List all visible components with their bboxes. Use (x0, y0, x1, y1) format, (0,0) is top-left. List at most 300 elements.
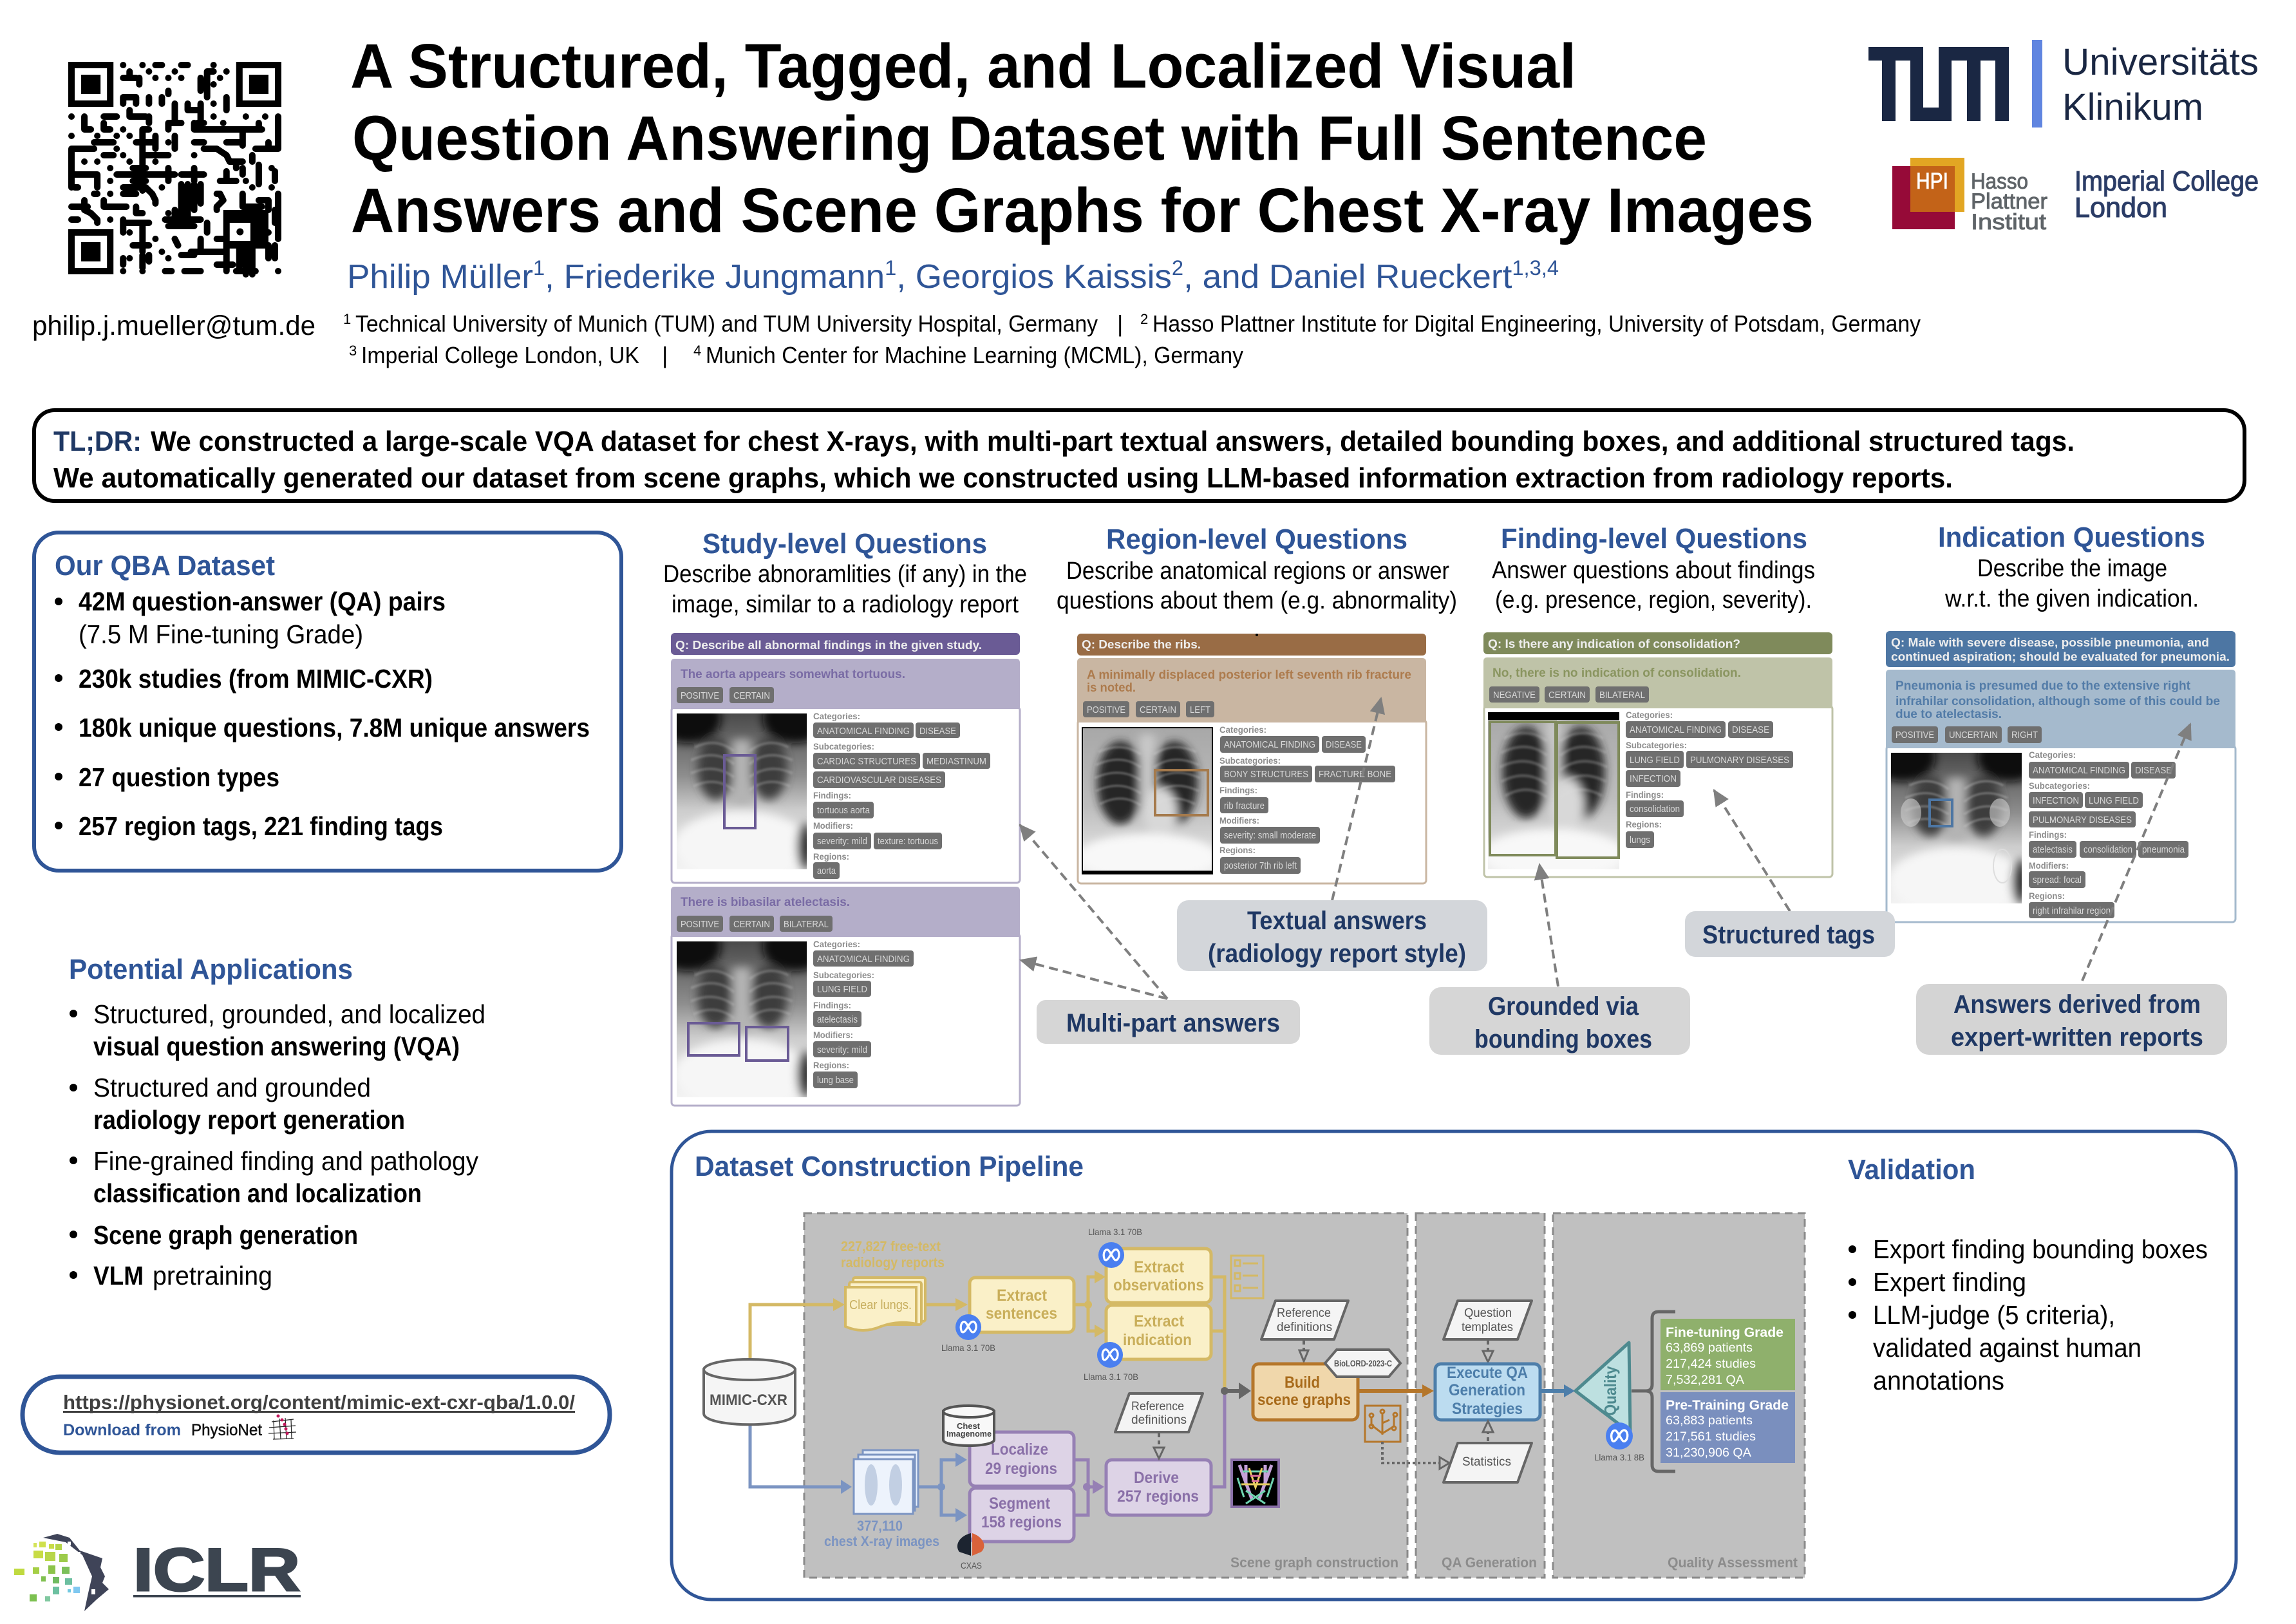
heading: Region-level Questions: Region-level Questions (1106, 524, 1407, 555)
stage: quality assessment: Quality Assessment (1668, 1554, 1798, 1571)
title (350, 31, 1814, 245)
callout: Answers derived from expert-written reports (1916, 984, 2227, 1055)
question bar (671, 633, 1020, 655)
model: BioLORD (1325, 1350, 1400, 1377)
structured tags: pneumonia (2142, 844, 2185, 855)
heading: Region-level Questions: questions about them (e.g. abnormality) (1057, 587, 1457, 614)
input: reference definitions bottom: Reference (1131, 1400, 1184, 1413)
validation list: annotations (1873, 1366, 2004, 1395)
panel: Our QBA Dataset (34, 533, 621, 871)
panel: TL;DR (34, 410, 2244, 501)
structured tags: BONY STRUCTURES (1224, 769, 1308, 780)
step: Segment 158 regions (970, 1488, 1074, 1542)
structured tags: MEDIASTINUM (927, 756, 986, 767)
dataset statistics list: 180k unique questions, 7.8M unique answers (79, 713, 590, 742)
heading: Indication Questions: Indication Questions (1938, 522, 2205, 553)
structured tags: Findings: (813, 790, 851, 800)
arrow: answers derived from reports (2082, 724, 2190, 981)
input: question templates: templates (1462, 1321, 1513, 1334)
question bar: Q: Is there any indication of consolidation? (1488, 637, 1740, 650)
step: Build scene graphs: scene graphs (1257, 1391, 1351, 1409)
step: Extract sentences: sentences (986, 1305, 1057, 1323)
icon: PhysioNet network (268, 1414, 296, 1439)
structured tags: Categories: (813, 939, 860, 949)
structured tags: lung base (817, 1075, 854, 1086)
step: Localize 29 regions: 29 regions (985, 1460, 1057, 1478)
structured tags: Regions: (2029, 891, 2065, 901)
structured tags: consolidation (2084, 844, 2132, 855)
affiliations: Munich Center for Machine Learning (MCML), Germany (706, 342, 1243, 368)
step: Extract sentences: Extract (997, 1287, 1048, 1305)
contact email: philip.j.mueller@tum.de (32, 310, 315, 341)
heading: Potential Applications: Potential Applications (69, 954, 353, 985)
answer (1482, 657, 1832, 881)
panel: TL;DR: We automatically generated our dataset from scene graphs, which we constructed using LLM-based information extraction from radiology reports. (53, 462, 1953, 494)
answer: POSITIVE (1087, 704, 1125, 715)
structured tags: Categories: (2029, 750, 2076, 760)
heading: Dataset Construction Pipeline: Dataset Construction Pipeline (695, 1151, 1084, 1182)
structured tags: PULMONARY DISEASES (1690, 755, 1789, 766)
answer part 2 (656, 887, 1020, 1110)
chest x-ray with bounding box (656, 694, 827, 882)
result: Pre-Training Grade (1661, 1392, 1795, 1463)
arrow: multi-part answers to first answer (1020, 825, 1167, 999)
heading: Study-level Questions: image, similar to a radiology report (672, 591, 1019, 618)
step: Localize 29 regions: Localize (991, 1440, 1048, 1459)
answer: RIGHT (2011, 730, 2038, 741)
database: Chest Imagenome (943, 1406, 994, 1446)
step: Derive 257 regions: 257 regions (1117, 1487, 1199, 1506)
affiliations: Technical University of Munich (TUM) and TUM University Hospital, Germany (355, 310, 1098, 337)
panel: region-level example card (1077, 634, 1426, 883)
affiliations (343, 310, 1921, 368)
step: Extract indication: indication (1123, 1331, 1192, 1349)
icon: anatomical segmentation thumbnail (1232, 1460, 1279, 1507)
database: Chest Imagenome: Imagenome (946, 1429, 992, 1439)
bracket: quality grade split (1632, 1312, 1675, 1471)
logo: Hasso Plattner Institut: Plattner (1971, 189, 2047, 214)
authors: 1 (885, 256, 896, 279)
structured tags (2029, 750, 2188, 918)
answer: No, there is no indication of consolidation. (1492, 666, 1741, 680)
structured tags: severity: small moderate (1224, 830, 1316, 841)
input: statistics (1444, 1443, 1532, 1482)
icon: report documents (845, 1278, 925, 1330)
applications list: visual question answering (VQA) (93, 1032, 460, 1061)
applications list: VLM (93, 1261, 144, 1290)
affiliations: Hasso Plattner Institute for Digital Engineering, University of Potsdam, Germany (1153, 310, 1921, 337)
callout: Grounded via bounding boxes: bounding boxes (1474, 1025, 1652, 1053)
step: Execute QA Generation Strategies (1435, 1364, 1540, 1420)
heading: Indication Questions (1938, 522, 2205, 612)
heading: Finding-level Questions: Answer questions about findings (1492, 557, 1815, 584)
validation list: Expert finding (1873, 1267, 2026, 1297)
structured tags: Subcategories: (1219, 755, 1281, 766)
step: Extract indication (1106, 1305, 1211, 1359)
authors: 2 (1172, 256, 1183, 279)
step: Segment 158 regions: Segment (989, 1495, 1051, 1513)
heading: Study-level Questions: Describe abnoramlities (if any) in the (663, 561, 1027, 588)
question bar: Q: Male with severe disease, possible pneumonia, and (1891, 636, 2209, 649)
label: chest x-ray images count: chest X-ray images (824, 1533, 939, 1549)
structured tags: Categories: (1219, 724, 1266, 735)
structured tags: Categories: (1626, 710, 1673, 720)
structured tags: LUNG FIELD (817, 984, 867, 995)
answer: BILATERAL (1599, 690, 1645, 701)
icon: chest x-ray images stack (854, 1450, 918, 1514)
result: Pre-Training Grade: 217,561 studies (1666, 1430, 1756, 1444)
structured tags: Findings: (2029, 829, 2067, 840)
validation list (1849, 1234, 2208, 1395)
input: question templates (1444, 1301, 1532, 1339)
title: Answers and Scene Graphs for Chest X-ray Images (351, 175, 1814, 245)
model: BioLORD: BioLORD-2023-C (1334, 1358, 1392, 1368)
arrow: templates to execution (1483, 1341, 1493, 1362)
structured tags: Findings: (1626, 789, 1664, 800)
structured tags: Regions: (1626, 819, 1662, 829)
heading: Our QBA Dataset: Our QBA Dataset (55, 550, 275, 581)
affiliations: 1 (343, 311, 351, 327)
heading: Study-level Questions (663, 528, 1027, 618)
chart: dataset construction pipeline (704, 1213, 1805, 1578)
result: Fine-tuning Grade: Fine-tuning Grade (1666, 1325, 1783, 1340)
logo: Hasso Plattner Institut: Hasso (1971, 169, 2028, 194)
structured tags: Modifiers: (2029, 860, 2069, 871)
structured tags: Categories: (813, 711, 860, 721)
answer: infrahilar consolidation, although some of this could be (1896, 695, 2220, 708)
structured tags: Findings: (813, 1000, 851, 1010)
structured tags: spread: focal (2033, 874, 2082, 885)
result: Pre-Training Grade: 63,883 patients (1666, 1414, 1753, 1428)
panel: TL;DR: TL;DR: (53, 426, 142, 457)
icon: scene graph tree (1365, 1406, 1400, 1442)
arrow: grounded via bounding boxes (1539, 864, 1558, 987)
structured tags: lungs (1630, 835, 1650, 845)
structured tags: CARDIOVASCULAR DISEASES (817, 775, 941, 786)
structured tags: Subcategories: (813, 970, 874, 980)
structured tags: atelectasis (817, 1014, 858, 1025)
answer part 1: POSITIVE (681, 690, 719, 701)
database: MIMIC-CXR (704, 1359, 795, 1424)
answer (1870, 670, 2235, 922)
structured tags: tortuous aorta (817, 805, 870, 816)
panel: pipeline and validation frame (672, 1131, 2236, 1600)
structured tags: aorta (817, 865, 836, 876)
input: statistics: Statistics (1462, 1455, 1511, 1469)
structured tags: DISEASE (1732, 724, 1769, 735)
question bar: Q: Describe all abnormal findings in the given study. (675, 639, 982, 652)
structured tags: ANATOMICAL FINDING (817, 726, 910, 737)
answer: is noted. (1087, 681, 1136, 695)
applications list: Structured and grounded (93, 1073, 371, 1102)
panel: dataset download link: PhysioNet (191, 1421, 262, 1439)
step: Execute QA Generation Strategies: Strategies (1452, 1400, 1523, 1418)
answer: Pneumonia is presumed due to the extensive right (1896, 679, 2191, 693)
answer: CERTAIN (1548, 690, 1586, 701)
connectors: image branch (750, 1424, 967, 1522)
label: radiology reports count: 227,827 free-text (841, 1238, 941, 1254)
validation list: LLM-judge (5 criteria), (1873, 1300, 2115, 1330)
dataset statistics list: 230k studies (from MIMIC-CXR) (79, 664, 433, 694)
structured tags: LUNG FIELD (1630, 755, 1680, 766)
panel: TL;DR: We constructed a large-scale VQA dataset for chest X-rays, with multi-part textual answers, detailed bounding boxes, and additional structured tags. (151, 426, 2075, 457)
step: Derive 257 regions (1106, 1460, 1211, 1515)
structured tags: PULMONARY DISEASES (2033, 815, 2132, 826)
callout: Multi-part answers (1037, 1000, 1300, 1044)
step: Segment 158 regions: 158 regions (981, 1513, 1062, 1531)
structured tags: Regions: (1219, 845, 1256, 855)
icon: QR code (71, 65, 278, 274)
icon: Llama model sentences: Llama 3.1 70B (941, 1343, 995, 1353)
structured tags: severity: mild (817, 1044, 867, 1055)
applications list: Scene graph generation (93, 1220, 358, 1250)
step: Extract indication: Extract (1134, 1312, 1185, 1330)
arrow: multi-part answers to second answer (1021, 960, 1167, 999)
structured tags: Modifiers: (813, 820, 853, 831)
database: Chest Imagenome: Chest (957, 1421, 981, 1431)
callout: Textual answers (1177, 900, 1487, 971)
structured tags: ANATOMICAL FINDING (1630, 724, 1722, 735)
input: reference definitions top: Reference (1277, 1307, 1331, 1320)
authors: , and Daniel Rueckert (1183, 258, 1512, 296)
logo: TUM Universitätsklinikum (1868, 40, 2259, 128)
arrow: dotted scene graph to statistics (1382, 1442, 1449, 1469)
heading: Region-level Questions: Describe anatomical regions or answer (1066, 558, 1449, 585)
step: Extract observations: Extract (1134, 1258, 1185, 1276)
icon: Llama model observations (1088, 1227, 1142, 1268)
panel: dataset download link: https://physionet.org/content/mimic-ext-cxr-qba/1.0.0/ (63, 1391, 575, 1413)
structured tags: CARDIAC STRUCTURES (817, 756, 916, 767)
answer: CERTAIN (1140, 704, 1176, 715)
logo: Imperial College London: London (2075, 192, 2167, 223)
applications list: Fine-grained finding and pathology (93, 1146, 478, 1176)
answer part 1 (656, 659, 1020, 883)
arrow: statistics to execution (1483, 1421, 1493, 1441)
dataset statistics list (55, 587, 590, 841)
chest x-ray with bounding boxes (656, 922, 827, 1110)
structured tags: ANATOMICAL FINDING (817, 954, 910, 965)
callout: Grounded via bounding boxes: Grounded via (1488, 992, 1639, 1021)
structured tags: Regions: (813, 1060, 849, 1070)
callout: Grounded via bounding boxes (1429, 987, 1690, 1055)
logo: Hasso Plattner Institut: Institut (1971, 210, 2047, 234)
icon: checklist (1231, 1256, 1263, 1298)
step: Build scene graphs (1253, 1364, 1358, 1420)
structured tags: FRACTURE BONE (1319, 769, 1391, 780)
dataset statistics list: 257 region tags, 221 finding tags (79, 811, 443, 841)
label: radiology reports count (841, 1238, 945, 1270)
stage: QA generation: QA Generation (1442, 1554, 1537, 1571)
stage: quality assessment (1553, 1213, 1805, 1578)
chest x-ray with bounding boxes (1482, 712, 1626, 881)
step: Extract observations (1106, 1249, 1211, 1303)
logo: TUM Universitätsklinikum: Universitäts (2062, 41, 2259, 83)
input: question templates: Question (1464, 1307, 1512, 1320)
arrow: QA generation to quality (1540, 1384, 1575, 1397)
panel: dataset download link: Download from (63, 1421, 181, 1439)
structured tags: DISEASE (1326, 739, 1362, 750)
structured tags: ANATOMICAL FINDING (1224, 739, 1315, 750)
logo: Hasso Plattner Institut (1892, 158, 2047, 234)
authors: 1 (533, 256, 545, 279)
structured tags (813, 939, 914, 1088)
question bar: Q: Describe the ribs. (1082, 638, 1201, 651)
validation list: Export finding bounding boxes (1873, 1234, 2208, 1264)
applications list: classification and localization (93, 1178, 422, 1208)
arrow: structured tags (1714, 790, 1790, 911)
structured tags: Findings: (1219, 785, 1257, 795)
icon: CXAS: CXAS (961, 1560, 982, 1571)
arrow: definitions to build (1299, 1341, 1308, 1361)
structured tags: Regions: (813, 851, 849, 862)
structured tags: consolidation (1630, 804, 1680, 815)
logo: Imperial College London: Imperial College (2075, 165, 2259, 197)
logo: ICLR: ICLR (133, 1536, 300, 1603)
affiliations: 3 (349, 343, 357, 359)
answer part 2: CERTAIN (733, 919, 770, 930)
icon: Llama model indication (1084, 1342, 1138, 1382)
logo: Imperial College London (2075, 165, 2259, 223)
step: Extract sentences (970, 1278, 1074, 1332)
callout: Multi-part answers: Multi-part answers (1066, 1009, 1280, 1037)
structured tags: texture: tortuous (878, 836, 938, 847)
answer: NEGATIVE (1493, 690, 1536, 701)
heading: Study-level Questions: Study-level Questions (702, 528, 987, 560)
label: chest x-ray images count (824, 1518, 939, 1549)
answer: POSITIVE (1896, 730, 1934, 741)
answer part 1: The aorta appears somewhat tortuous. (681, 668, 905, 681)
panel: indication example card (1870, 631, 2235, 922)
answer: LEFT (1190, 704, 1210, 715)
arrow: merge to build scene graphs (1221, 1383, 1251, 1399)
panel: Validation (1848, 1154, 2208, 1395)
stage: scene graph construction (804, 1213, 1407, 1578)
affiliations: 2 (1140, 311, 1148, 327)
affiliations: Imperial College London, UK (361, 342, 639, 368)
step: Execute QA Generation Strategies: Execute QA (1447, 1364, 1528, 1382)
question bar (1483, 632, 1832, 654)
structured tags: Modifiers: (1219, 815, 1259, 826)
answer: due to atelectasis. (1896, 708, 2002, 721)
dataset statistics list: (7.5 M Fine-tuning Grade) (79, 619, 363, 649)
structured tags (813, 711, 990, 879)
result: Fine-tuning Grade (1661, 1319, 1795, 1390)
answer part 1: CERTAIN (733, 690, 770, 701)
callout: Textual answers: Textual answers (1247, 907, 1427, 935)
question bar: continued aspiration; should be evaluated for pneumonia. (1891, 650, 2230, 663)
icon: CXAS (957, 1533, 984, 1571)
logo: TUM Universitätsklinikum: Klinikum (2062, 86, 2203, 128)
structured tags: severity: mild (817, 836, 867, 847)
structured tags (1219, 724, 1395, 874)
authors: 1,3,4 (1512, 256, 1559, 279)
affiliations: | (662, 342, 668, 368)
step: Extract observations: observations (1113, 1276, 1204, 1294)
callout: Structured tags (1685, 911, 1895, 957)
heading: Indication Questions: w.r.t. the given indication. (1944, 585, 2199, 612)
input: reference definitions bottom: definitions (1131, 1413, 1187, 1427)
stage: QA generation (1416, 1213, 1545, 1578)
panel: dataset download link (23, 1377, 610, 1453)
connectors: report branch (750, 1270, 1225, 1391)
icon: Llama model observations: Llama 3.1 70B (1088, 1227, 1142, 1237)
result: Pre-Training Grade: Pre-Training Grade (1666, 1398, 1789, 1413)
answer: A minimally displaced posterior left seventh rib fracture (1087, 668, 1411, 682)
structured tags: ANATOMICAL FINDING (2033, 765, 2125, 776)
heading: Indication Questions: Describe the image (1977, 555, 2167, 582)
heading: Finding-level Questions: Finding-level Questions (1501, 523, 1807, 554)
applications list: Structured, grounded, and localized (93, 999, 485, 1029)
chest x-ray with bounding box (1077, 727, 1218, 882)
title: Question Answering Dataset with Full Sentence (352, 103, 1707, 173)
structured tags: rib fracture (1224, 800, 1265, 811)
icon: Llama model quality: Llama 3.1 8B (1594, 1452, 1644, 1462)
structured tags: LUNG FIELD (2089, 795, 2139, 806)
structured tags (1626, 710, 1793, 848)
callout: Textual answers: (radiology report style) (1208, 939, 1466, 968)
structured tags: INFECTION (2033, 795, 2079, 806)
structured tags: right infrahilar region (2033, 905, 2111, 916)
answer part 2: BILATERAL (784, 919, 829, 930)
panel: study-level example card (656, 633, 1020, 1110)
title: A Structured, Tagged, and Localized Visual (350, 31, 1576, 101)
structured tags: INFECTION (1630, 773, 1677, 784)
structured tags: Subcategories: (1626, 740, 1687, 750)
step: Execute QA Generation Strategies: Generation (1449, 1381, 1525, 1399)
step: Derive 257 regions: Derive (1134, 1469, 1179, 1487)
authors: Philip Müller (347, 258, 529, 296)
chest x-ray with bounding box (1870, 734, 2042, 916)
answer (1077, 658, 1426, 883)
input: reference definitions top: definitions (1277, 1321, 1332, 1334)
structured tags: posterior 7th rib left (1224, 860, 1297, 871)
heading: Finding-level Questions: (e.g. presence, region, severity). (1495, 587, 1812, 614)
result: Fine-tuning Grade: 63,869 patients (1666, 1341, 1753, 1355)
result: Pre-Training Grade: 31,230,906 QA (1666, 1446, 1751, 1460)
question bar (1077, 634, 1426, 656)
step: Build scene graphs: Build (1284, 1374, 1320, 1392)
answer: UNCERTAIN (1949, 730, 1998, 741)
panel: Potential Applications (69, 954, 485, 1290)
affiliations: | (1117, 310, 1123, 337)
step: Localize 29 regions (970, 1432, 1074, 1486)
callout: Answers derived from expert-written reports: expert-written reports (1951, 1023, 2203, 1052)
affiliations: 4 (693, 343, 701, 359)
heading: Finding-level Questions (1492, 523, 1815, 614)
icon: Llama model quality (1594, 1422, 1644, 1462)
answer part 2: There is bibasilar atelectasis. (681, 896, 850, 909)
question bar (1886, 631, 2235, 667)
result: Fine-tuning Grade: 217,424 studies (1666, 1357, 1756, 1371)
structured tags: atelectasis (2033, 844, 2073, 855)
dataset statistics list: 42M question-answer (QA) pairs (79, 587, 446, 616)
input: reference definitions top (1261, 1301, 1348, 1339)
icon: report documents: Clear lungs. (849, 1298, 912, 1312)
callout: Structured tags: Structured tags (1702, 921, 1875, 949)
arrow: textual answers (1332, 698, 1381, 900)
dataset statistics list: 27 question types (79, 762, 279, 792)
arrow: build to QA generation (1358, 1384, 1434, 1397)
stage: scene graph construction: Scene graph construction (1230, 1554, 1398, 1571)
authors: , Georgios Kaissis (896, 258, 1172, 296)
heading: Region-level Questions (1057, 524, 1457, 614)
label: chest x-ray images count: 377,110 (857, 1518, 903, 1534)
icon: Llama model indication: Llama 3.1 70B (1084, 1372, 1138, 1382)
validation list: validated against human (1873, 1333, 2141, 1363)
applications list: pretraining (153, 1261, 272, 1290)
structured tags: Modifiers: (813, 1030, 853, 1040)
panel: finding-level example card (1482, 632, 1832, 881)
